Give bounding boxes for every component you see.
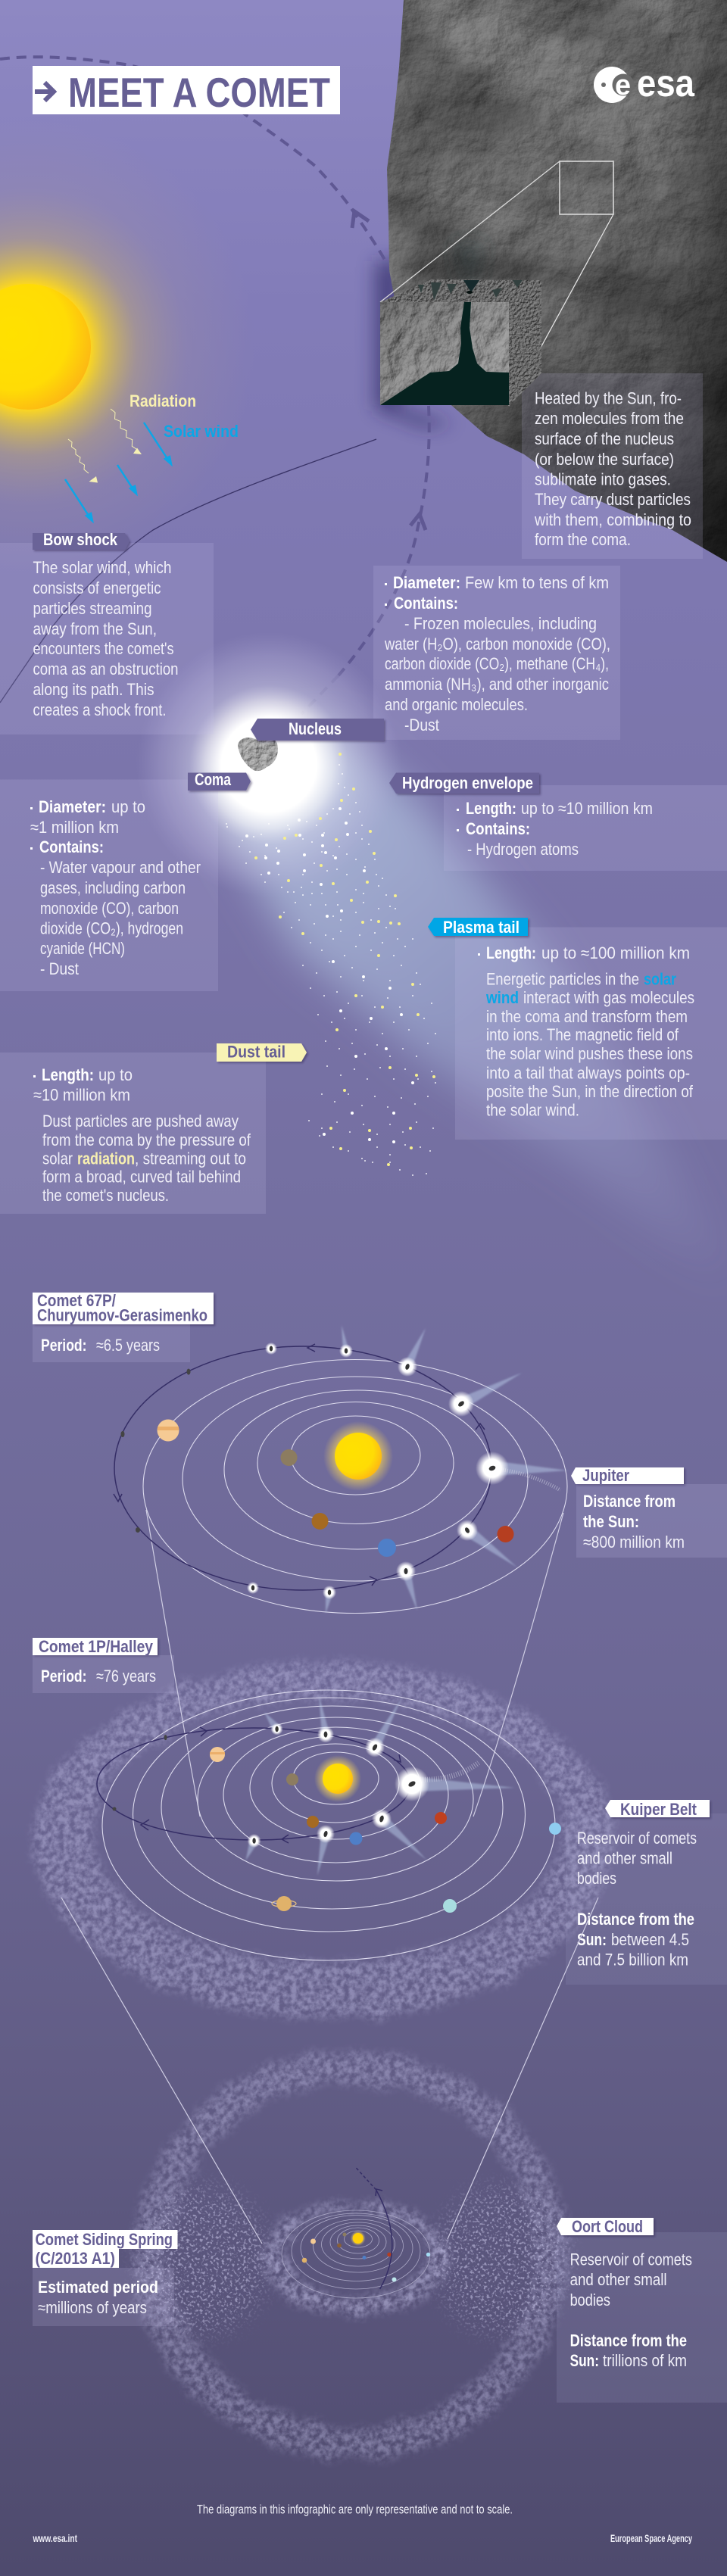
outer shell scatter, right side bbox=[437, 2188, 566, 2332]
panel: Siding Spring period: Estimated period bbox=[38, 2278, 158, 2297]
panel: bow shock: particles streaming bbox=[33, 599, 151, 618]
panel: plasma tail bbox=[455, 927, 727, 1140]
panel: bow shock: creates a shock front. bbox=[33, 700, 167, 719]
comet tails and coma bbox=[136, 632, 727, 1287]
panel: Heated by the Sun: Heated by the Sun, fro- bbox=[535, 389, 682, 407]
panel: 67P period: Period: bbox=[41, 1336, 86, 1355]
panel: dust tail: Dust particles are pushed away bbox=[42, 1112, 239, 1131]
panel: hydrogen envelope: Length: bbox=[466, 799, 516, 818]
heading: comet Siding Spring: Comet Siding Spring bbox=[35, 2230, 173, 2249]
heading: comet Halley: Comet 1P/Halley bbox=[39, 1637, 154, 1656]
label: solar wind: Solar wind bbox=[164, 422, 239, 441]
label: plasma tail: Plasma tail bbox=[443, 918, 520, 937]
panel: dust tail bbox=[0, 1053, 266, 1214]
panel: dust tail: Length: bbox=[42, 1065, 94, 1084]
outer shell ring bbox=[135, 2051, 568, 2459]
panel: plasma tail: posite the Sun, in the direction of bbox=[486, 1082, 694, 1101]
panel: Kuiper Belt: and 7.5 billion km bbox=[577, 1951, 688, 1969]
cut-away block of the nucleus bbox=[380, 161, 613, 406]
label: Jupiter bbox=[571, 1466, 684, 1485]
heading: comet 67P: Comet 67P/ bbox=[37, 1291, 116, 1310]
panel: Jupiter distance bbox=[576, 1484, 727, 1558]
panel: coma: - Dust bbox=[40, 959, 79, 978]
heading: bow shock: Bow shock bbox=[43, 530, 118, 549]
label: nucleus bbox=[251, 719, 384, 741]
panel: dust tail: from the coma by the pressure of bbox=[42, 1131, 251, 1149]
panel: Heated by the Sun: They carry dust particles bbox=[535, 490, 691, 509]
outer shell scatter, left side bbox=[139, 2188, 267, 2332]
panel: dust tail: radiation bbox=[77, 1149, 135, 1168]
label: radiation: Radiation bbox=[129, 391, 196, 410]
panel: nucleus: ammonia (NH₃), and other inorganic bbox=[385, 675, 609, 694]
panel: Jupiter distance: Distance from bbox=[583, 1492, 676, 1511]
panel: Heated by the Sun: (or below the surface) bbox=[535, 450, 674, 469]
panel: plasma tail: into ions. The magnetic field of bbox=[486, 1025, 679, 1044]
heading: comet 67P bbox=[33, 1291, 214, 1325]
panel: plasma tail: solar bbox=[644, 969, 676, 989]
connector lines to Oort Cloud diagram bbox=[61, 1898, 598, 2244]
panel: nucleus bbox=[373, 566, 620, 740]
panel: Heated by the Sun bbox=[522, 373, 703, 559]
label: hydrogen envelope: Hydrogen envelope bbox=[402, 774, 533, 792]
comet nucleus surface close-up bbox=[375, 0, 727, 562]
panel: Heated by the Sun: surface of the nucleus bbox=[535, 429, 674, 448]
panel: dust tail: form a broad, curved tail behind bbox=[42, 1168, 241, 1187]
panel: coma: up to bbox=[111, 797, 145, 816]
panel: plasma tail: Energetic particles in the bbox=[486, 969, 639, 989]
panel: Oort Cloud: Reservoir of comets bbox=[570, 2250, 692, 2269]
icon: comet nucleus bbox=[238, 738, 278, 771]
heading: comet Siding Spring bbox=[33, 2230, 177, 2268]
panel: coma: Contains: bbox=[39, 837, 104, 856]
panel: Heated by the Sun: with them, combining to bbox=[534, 510, 691, 529]
panel: Oort Cloud: Sun: bbox=[570, 2351, 599, 2370]
panel: 67P period: ≈6.5 years bbox=[96, 1336, 160, 1355]
panel: bow shock: away from the Sun, bbox=[33, 619, 157, 638]
panel: plasma tail: into a tail that always points op- bbox=[486, 1063, 690, 1083]
planet orbits bbox=[282, 2210, 430, 2298]
panel: bow shock: encounters the comet's bbox=[33, 639, 174, 658]
panel: nucleus: - Frozen molecules, including bbox=[404, 614, 597, 633]
footnote: The diagrams in this infographic are only representative and not to scale. bbox=[197, 2503, 513, 2517]
bow shock curve bbox=[0, 439, 376, 703]
panel: coma bbox=[0, 780, 218, 991]
diagram: Oort Cloud bbox=[135, 2051, 568, 2459]
title: MEET A COMET bbox=[68, 69, 330, 116]
inner Kuiper Belt ring bbox=[263, 2202, 448, 2314]
dashed comet trajectory bbox=[0, 57, 429, 714]
panel: bow shock bbox=[0, 530, 214, 734]
panel: Heated by the Sun: zen molecules from the bbox=[535, 409, 684, 428]
panel: Halley period bbox=[33, 1655, 174, 1693]
panel: nucleus: and organic molecules. bbox=[385, 695, 528, 714]
panel: nucleus: Few km to tens of km bbox=[465, 573, 609, 592]
panel: coma: gases, including carbon bbox=[40, 878, 186, 897]
panel: hydrogen envelope: - Hydrogen atoms bbox=[467, 840, 579, 859]
heading: comet Siding Spring: (C/2013 A1) bbox=[35, 2249, 115, 2268]
panel: nucleus: Contains: bbox=[394, 594, 458, 613]
comet Siding Spring path bbox=[354, 2166, 392, 2289]
panel: 67P period bbox=[33, 1324, 190, 1362]
icon: sun bbox=[323, 1421, 393, 1491]
panel: plasma tail: Length: bbox=[486, 943, 536, 962]
panel: Kuiper Belt: Reservoir of comets bbox=[577, 1829, 697, 1848]
panel: bow shock: coma as an obstruction bbox=[33, 660, 179, 678]
panel: Kuiper Belt: bodies bbox=[577, 1869, 616, 1888]
panel: plasma tail: the solar wind pushes these ions bbox=[486, 1044, 693, 1063]
label: dust tail: Dust tail bbox=[227, 1042, 285, 1062]
panel: Kuiper Belt: and other small bbox=[577, 1849, 672, 1868]
radiation and solar wind arrows bbox=[65, 409, 171, 521]
planet orbits bbox=[102, 1690, 555, 1960]
panel: Halley period: ≈76 years bbox=[96, 1667, 156, 1686]
footer: website: www.esa.int bbox=[33, 2533, 77, 2544]
panel: Siding Spring period bbox=[33, 2268, 174, 2326]
panel: hydrogen envelope: Contains: bbox=[466, 819, 530, 838]
panel: nucleus: carbon dioxide (CO₂), methane (CH₄), bbox=[385, 654, 609, 673]
panel: coma: Diameter: bbox=[39, 797, 106, 816]
panel: bow shock: The solar wind, which bbox=[33, 558, 171, 577]
panel: Oort Cloud bbox=[557, 2232, 727, 2403]
planet orbits bbox=[143, 1360, 567, 1613]
comet orbit bbox=[114, 1344, 491, 1590]
planets bbox=[210, 1747, 561, 1913]
panel: bow shock: along its path. This bbox=[33, 680, 154, 699]
panel: plasma tail: wind bbox=[485, 988, 519, 1007]
panel: Kuiper Belt: between 4.5 bbox=[611, 1930, 689, 1949]
panel: coma: monoxide (CO), carbon bbox=[40, 899, 179, 918]
panel: Kuiper Belt: Sun: bbox=[577, 1930, 607, 1949]
label: coma: Coma bbox=[195, 770, 232, 789]
panel: Oort Cloud: bodies bbox=[570, 2291, 610, 2309]
panel: plasma tail: up to ≈100 million km bbox=[541, 943, 690, 962]
panel: Halley period: Period: bbox=[41, 1667, 86, 1686]
diagram: solar system with comet Halley orbit bbox=[97, 1690, 561, 1960]
panel: Oort Cloud: Distance from the bbox=[570, 2331, 687, 2350]
panel: coma: cyanide (HCN) bbox=[40, 939, 125, 958]
planets bbox=[158, 1419, 513, 1557]
panel: Jupiter distance: ≈800 million km bbox=[583, 1533, 685, 1552]
panel: hydrogen envelope bbox=[444, 785, 727, 871]
panel: Heated by the Sun: form the coma. bbox=[535, 530, 631, 549]
panel: dust tail: solar bbox=[42, 1149, 73, 1168]
label: Jupiter: Jupiter bbox=[582, 1466, 629, 1485]
panel: Siding Spring period: ≈millions of years bbox=[38, 2298, 147, 2317]
dust tail particles bbox=[226, 754, 435, 1175]
comet positions bbox=[121, 1325, 568, 1614]
panel: dust tail: , streaming out to bbox=[135, 1149, 246, 1168]
label: Oort Cloud: Oort Cloud bbox=[572, 2217, 643, 2236]
panel: plasma tail: in the coma and transform them bbox=[486, 1007, 688, 1026]
panel: Kuiper Belt bbox=[566, 1813, 727, 1985]
panel: coma: dioxide (CO₂), hydrogen bbox=[40, 919, 183, 937]
label: nucleus: Nucleus bbox=[289, 719, 342, 738]
panel: coma: - Water vapour and other bbox=[40, 858, 201, 877]
footer: agency name: European Space Agency bbox=[610, 2533, 692, 2544]
diagram: miniature solar system in Oort Cloud bbox=[282, 2166, 430, 2298]
panel: plasma tail: the solar wind. bbox=[486, 1101, 579, 1120]
panel: dust tail: the comet's nucleus. bbox=[42, 1186, 169, 1205]
planets bbox=[302, 2232, 430, 2282]
panel: Heated by the Sun: sublimate into gases. bbox=[535, 470, 671, 489]
logo: ESA: e bbox=[615, 70, 631, 101]
panel: nucleus: water (H₂O), carbon monoxide (CO), bbox=[384, 635, 610, 653]
sun with radiating glow bbox=[0, 120, 255, 574]
diagram: inner solar system with comet 67P orbit bbox=[114, 1325, 568, 1614]
panel: dust tail: ≈10 million km bbox=[33, 1086, 130, 1105]
logo: ESA bbox=[594, 62, 695, 104]
icon: sun bbox=[351, 2231, 366, 2246]
panel: plasma tail: interact with gas molecules bbox=[523, 988, 694, 1007]
label: coma bbox=[188, 770, 251, 791]
panel: coma: ≈1 million km bbox=[30, 818, 119, 837]
panel: nucleus: -Dust bbox=[404, 716, 439, 734]
panel: bow shock: consists of energetic bbox=[33, 579, 161, 597]
comet positions bbox=[112, 1695, 515, 1876]
panel: dust tail: up to bbox=[98, 1065, 133, 1084]
panel: Jupiter distance: the Sun: bbox=[583, 1512, 639, 1531]
logo: ESA: esa bbox=[637, 62, 695, 104]
panel: Oort Cloud: trillions of km bbox=[603, 2351, 687, 2370]
panel: Oort Cloud: and other small bbox=[570, 2270, 667, 2289]
panel: hydrogen envelope: up to ≈10 million km bbox=[521, 799, 653, 818]
panel: Kuiper Belt: Distance from the bbox=[577, 1910, 694, 1929]
label: Kuiper Belt: Kuiper Belt bbox=[620, 1800, 697, 1819]
heading: comet 67P: Churyumov-Gerasimenko bbox=[37, 1306, 207, 1325]
icon: sun bbox=[314, 1755, 361, 1802]
connector lines to Halley diagram bbox=[146, 1510, 563, 1817]
comet orbit bbox=[97, 1727, 410, 1843]
diagram: Kuiper Belt bbox=[35, 1662, 613, 2018]
panel: nucleus: Diameter: bbox=[393, 573, 460, 592]
